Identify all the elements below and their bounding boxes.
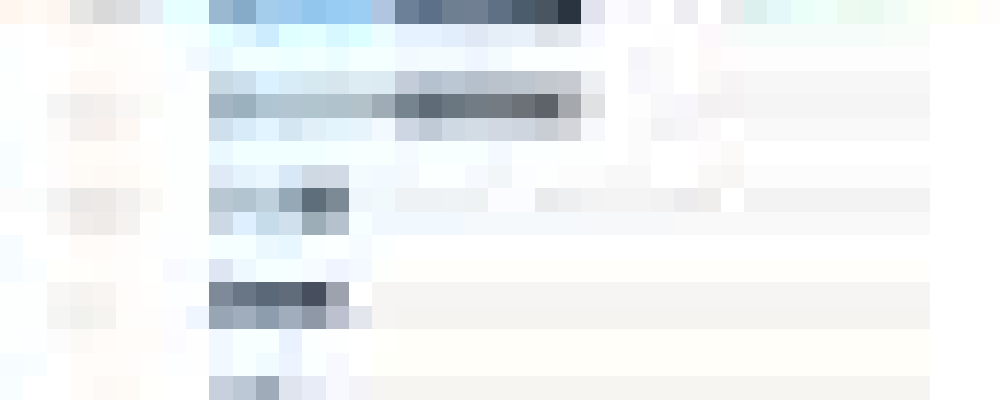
row 11: [0, 259, 372, 282]
row 4: [47, 94, 930, 118]
row 16: [93, 376, 930, 400]
row 13: [47, 306, 930, 329]
row 5: [70, 118, 698, 141]
row 15: [0, 353, 302, 376]
row 6: [70, 141, 698, 165]
row 1: [70, 24, 884, 47]
row 10: [0, 235, 581, 259]
row 3: [70, 71, 744, 94]
row 14: [47, 329, 930, 353]
header band: [0, 0, 977, 24]
row 2: [186, 47, 651, 71]
row 7: [70, 165, 744, 188]
row 12: [47, 282, 930, 306]
row 9: [70, 212, 581, 235]
row 8: [47, 188, 930, 212]
